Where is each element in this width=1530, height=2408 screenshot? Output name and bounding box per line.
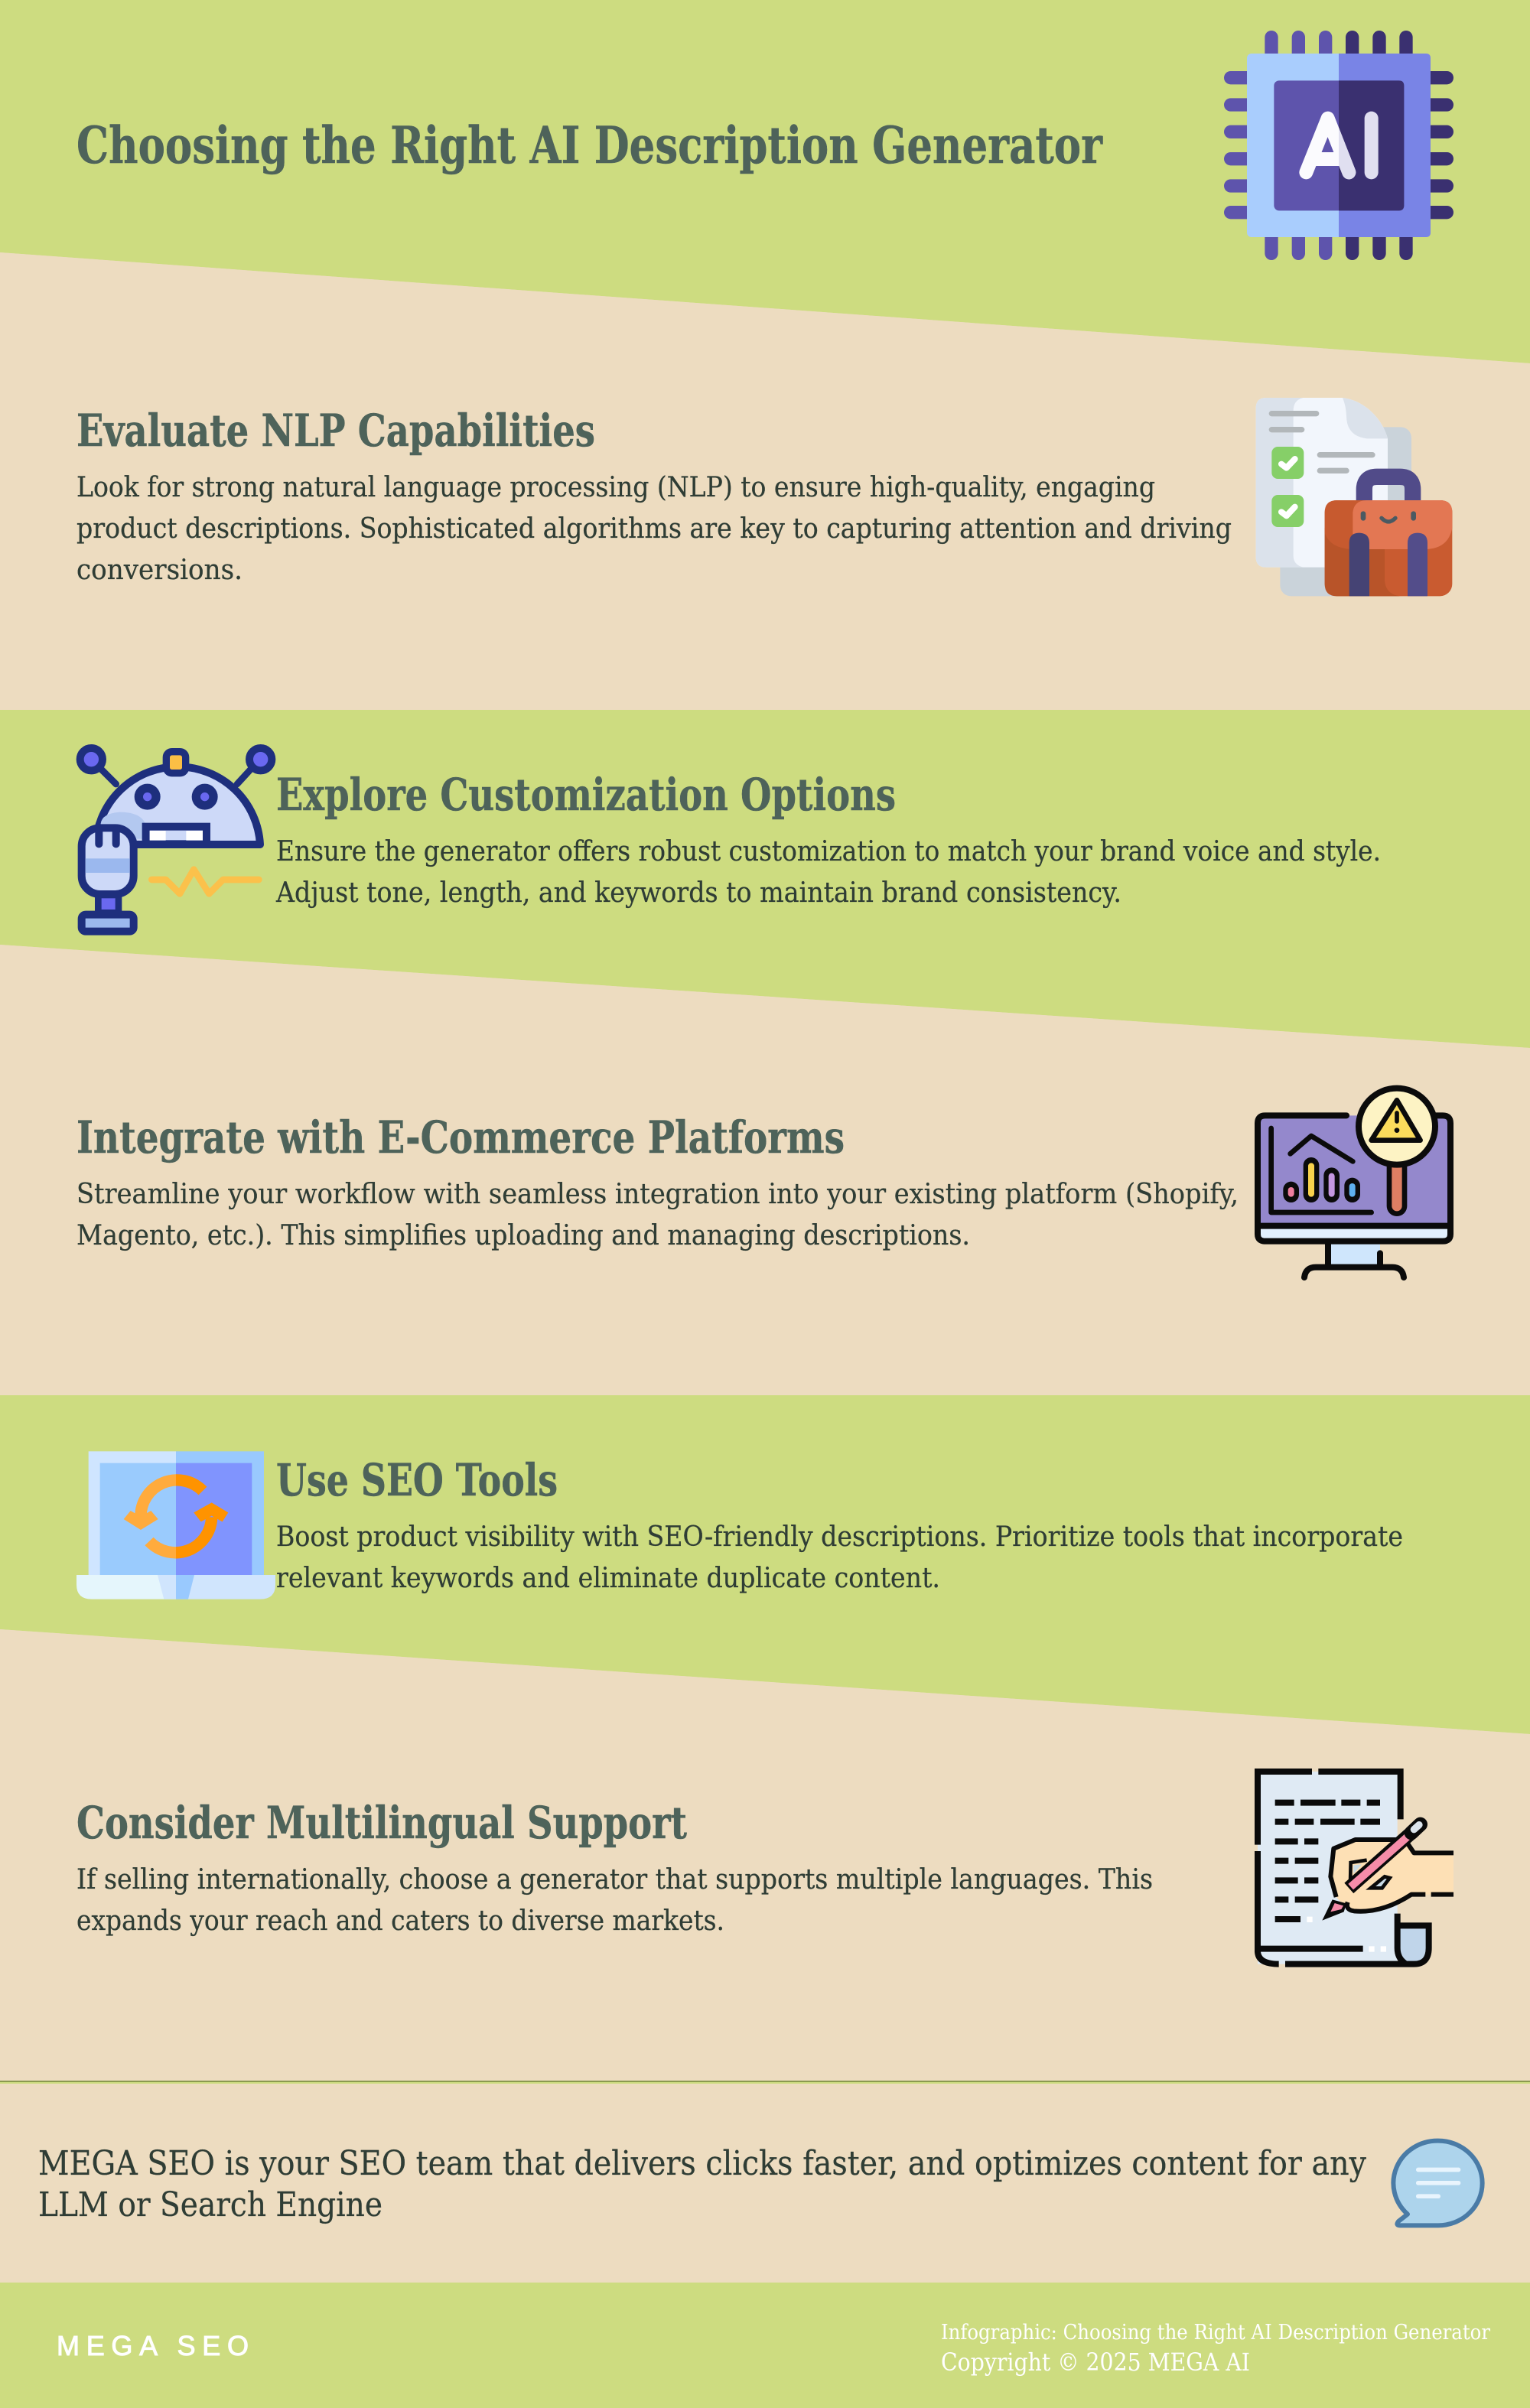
callout: MEGA SEO message <box>38 2144 1366 2224</box>
icon: AI chip <box>1231 37 1447 253</box>
panel: use SEO tools <box>0 1395 1530 1734</box>
icon: chat bubble <box>1393 2141 1483 2225</box>
icon: hand writing on document <box>1255 1772 1454 1964</box>
body text <box>76 1179 1239 1251</box>
icon: checklist and briefcase <box>1256 398 1452 596</box>
icon: monitor with warning magnifier <box>1258 1088 1450 1277</box>
footer <box>0 2283 1530 2408</box>
panel: evaluate NLP capabilities <box>0 252 1530 710</box>
copyright: Copyright © 2025 MEGA AI <box>941 2348 1250 2377</box>
body text: Boost product visibility with SEO-friendly descriptions. Prioritize tools that incorporate <box>276 1521 1403 1553</box>
icon: robot with microphone <box>80 748 272 932</box>
icon: laptop with refresh arrows <box>76 1451 275 1599</box>
heading: Evaluate NLP Capabilities <box>76 405 595 457</box>
divider line <box>0 2081 1530 2084</box>
logo: MEGA SEO: MEGA SEO <box>57 2330 249 2361</box>
body text: If selling internationally, choose a generator that supports multiple languages. This <box>76 1864 1153 1895</box>
body text <box>275 836 1381 909</box>
body text <box>76 1864 1153 1937</box>
title: Choosing the Right AI Description Generator <box>76 116 1103 175</box>
panel: explore customization options <box>0 710 1530 1048</box>
body text <box>276 1521 1403 1594</box>
body text: Ensure the generator offers robust customization to match your brand voice and style. <box>276 836 1381 867</box>
body text <box>76 472 1232 586</box>
body text: Streamline your workflow with seamless integration into your existing platform (Shopify, <box>76 1179 1239 1210</box>
panel: integrate with e-commerce platforms <box>0 945 1530 1395</box>
body text: relevant keywords and eliminate duplicate content. <box>276 1563 940 1594</box>
heading: Use SEO Tools <box>276 1454 558 1506</box>
panel: header <box>0 0 1530 363</box>
heading: Integrate with E-Commerce Platforms <box>76 1111 845 1163</box>
body text: Look for strong natural language processing (NLP) to ensure high-quality, engaging <box>76 472 1155 503</box>
callout: MEGA SEO message: MEGA SEO is your SEO team that delivers clicks faster, and optimizes content for any <box>38 2144 1366 2183</box>
callout: MEGA SEO message: LLM or Search Engine <box>38 2185 382 2224</box>
body text: conversions. <box>76 555 243 586</box>
heading: Consider Multilingual Support <box>76 1797 687 1849</box>
body text: Adjust tone, length, and keywords to maintain brand consistency. <box>275 877 1121 909</box>
body text: Magento, etc.). This simplifies uploading and managing descriptions. <box>76 1220 970 1251</box>
body text: product descriptions. Sophisticated algorithms are key to capturing attention and driving <box>76 513 1232 545</box>
body text: expands your reach and caters to diverse markets. <box>76 1905 724 1937</box>
heading: Explore Customization Options <box>276 769 896 821</box>
panel: consider multilingual support <box>0 1629 1530 2081</box>
